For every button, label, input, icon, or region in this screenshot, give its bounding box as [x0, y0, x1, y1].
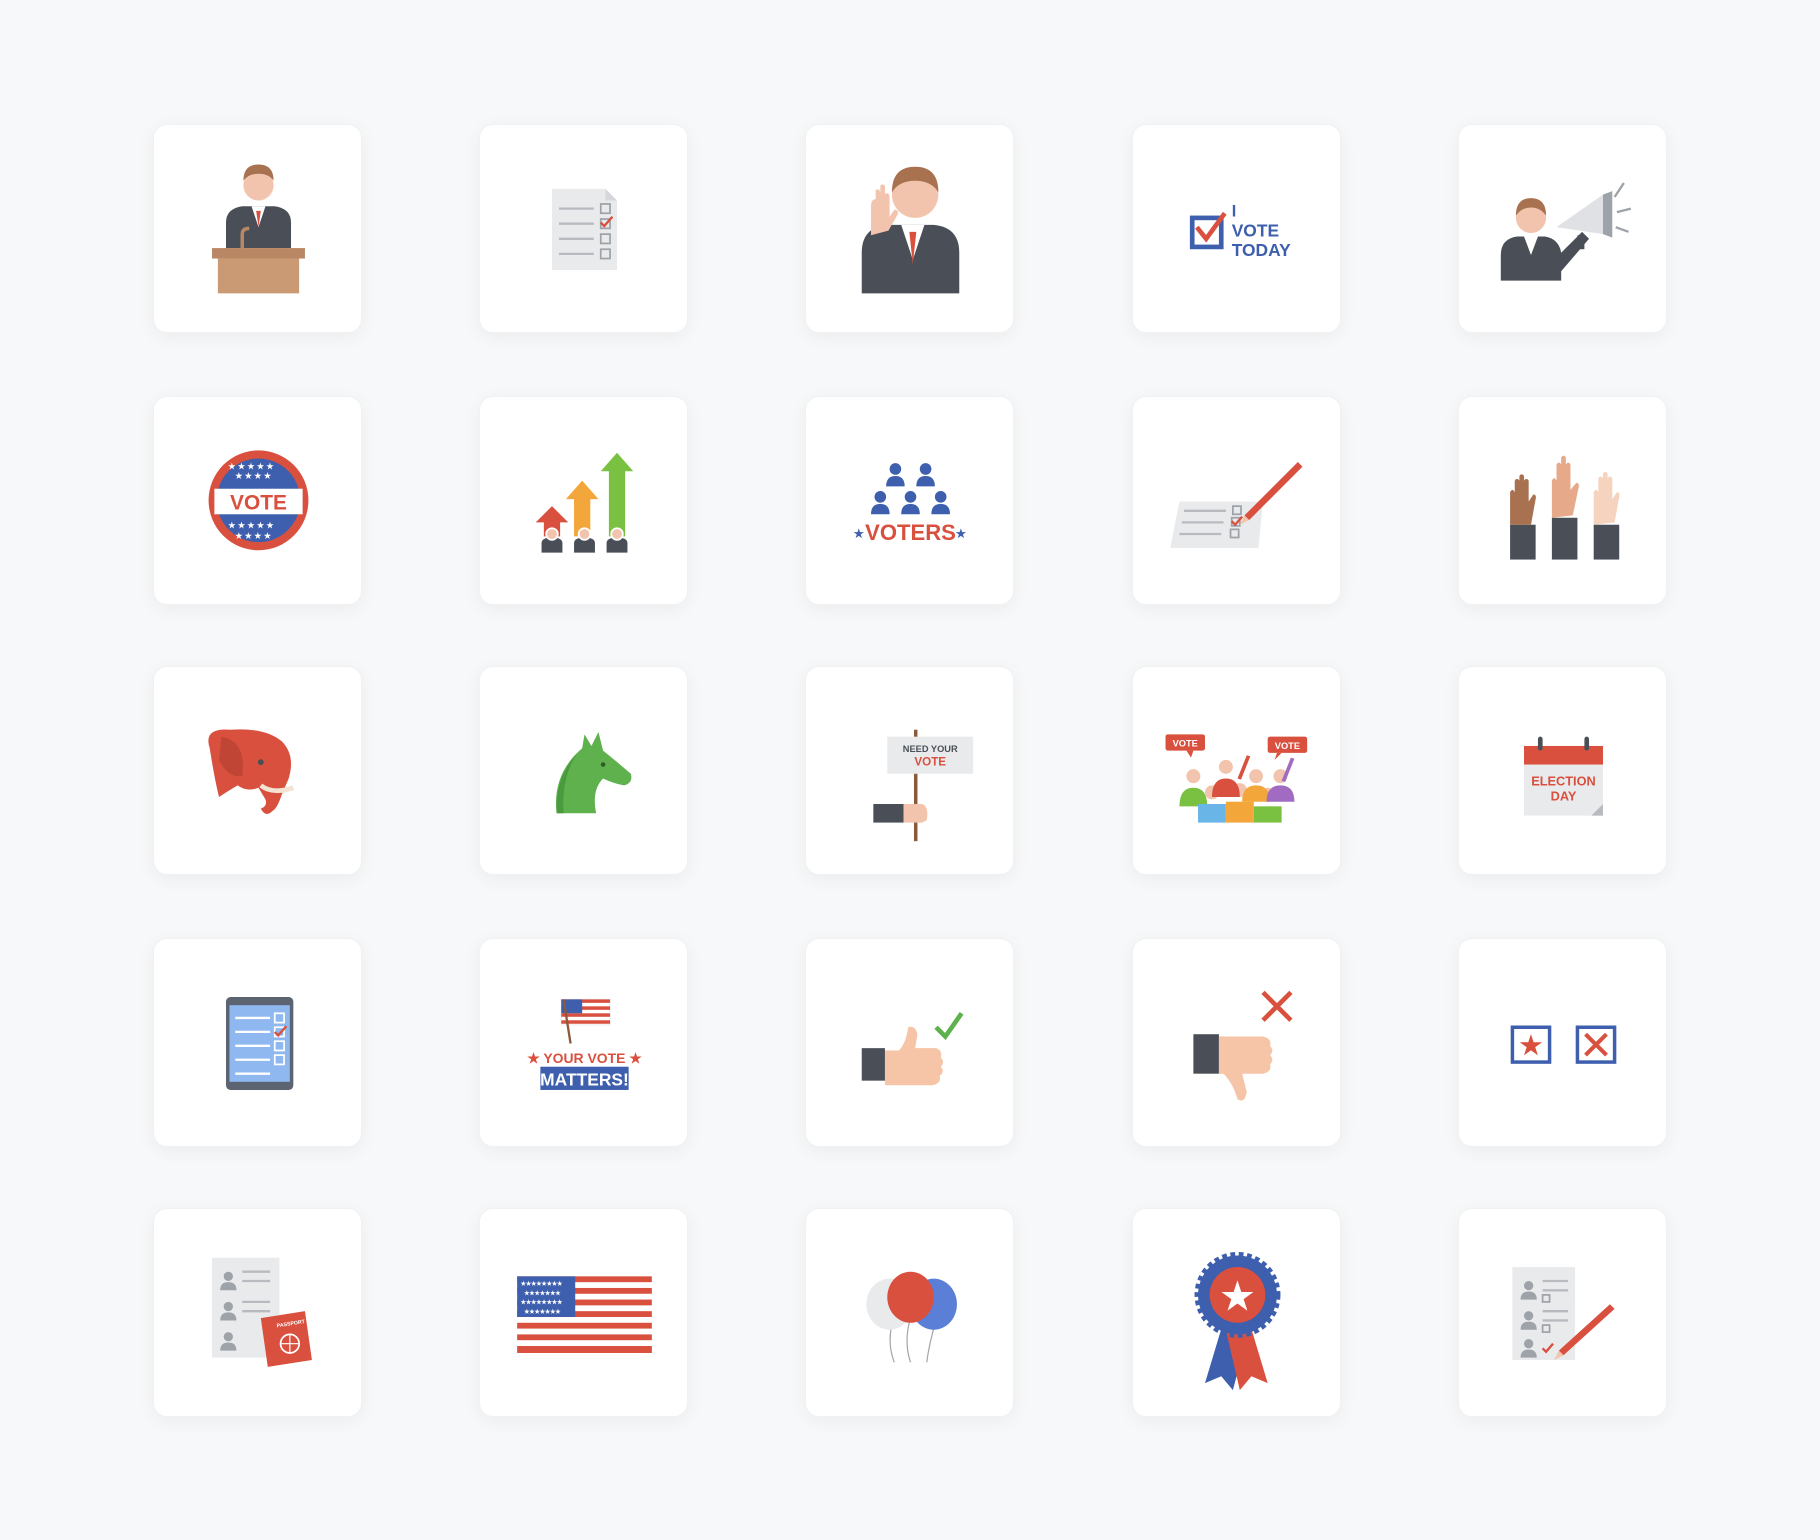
icon: raised hands: [1510, 456, 1620, 560]
icon: american flag: [517, 1276, 652, 1353]
icon: ballot document: [552, 189, 617, 270]
icon: protest sign: NEED YOUR: [903, 744, 958, 754]
card: ballot document: [479, 124, 688, 333]
card: raised hands: [1458, 396, 1667, 605]
icon: protest sign: [873, 730, 973, 841]
card: I vote today: [1132, 124, 1341, 333]
card: vote badge: [153, 396, 362, 605]
card: speaker at podium: [153, 124, 362, 333]
icon: american flag: ★★★★★★★: [524, 1308, 561, 1315]
icon: crowd with vote bubbles: VOTE: [1173, 739, 1198, 749]
icon: crowd with vote bubbles: [1166, 734, 1307, 823]
card: need your vote sign: [805, 666, 1014, 875]
icon: vote badge: ★ ★ ★ ★: [234, 532, 272, 541]
card: star and x boxes: [1458, 938, 1667, 1147]
icon: growth arrows with people: [536, 453, 633, 553]
icon: vote badge: [209, 450, 308, 550]
card: crowd voting: [1132, 666, 1341, 875]
card: thumbs down: [1132, 938, 1341, 1147]
icon: thumbs up with check: [862, 1013, 962, 1085]
icon: registration list with pencil: [1512, 1267, 1615, 1360]
icon: balloons: [866, 1272, 957, 1362]
card: award rosette: [1132, 1208, 1341, 1417]
icon: vote badge: ★ ★ ★ ★: [234, 471, 272, 480]
icon: ballot with pencil: [1170, 462, 1303, 548]
card: papers with pencil: [1458, 1208, 1667, 1417]
card: megaphone man: [1458, 124, 1667, 333]
icon: your vote matters banner: MATTERS!: [540, 1069, 629, 1089]
icon: I vote today: VOTE: [1232, 220, 1279, 240]
card: oath man: [805, 124, 1014, 333]
card: thumbs up: [805, 938, 1014, 1147]
icon: american flag: ★★★★★★★★: [521, 1281, 563, 1288]
icon: voters group: [854, 463, 967, 545]
icon: election day calendar: ELECTION: [1531, 773, 1596, 788]
icon: election day calendar: DAY: [1551, 789, 1577, 804]
card: donkey: [479, 666, 688, 875]
card: US flag: [479, 1208, 688, 1417]
icon: rosette ribbon: [1198, 1255, 1277, 1390]
icon: voters group: ★: [854, 527, 865, 540]
icon: thumbs down with X: [1193, 992, 1291, 1101]
icon: man with megaphone: [1501, 183, 1631, 281]
icon: protest sign: VOTE: [914, 756, 946, 769]
card: ID documents and passport: [153, 1208, 362, 1417]
icon: american flag: ★★★★★★★★: [521, 1299, 563, 1306]
icon: star box and X box: ★: [1520, 1032, 1544, 1060]
icon: I vote today: TODAY: [1232, 240, 1291, 260]
icon: star box and X box: [1512, 1027, 1615, 1062]
icon: I vote today: I: [1232, 203, 1236, 221]
icon: rosette ribbon: ★: [1221, 1275, 1254, 1317]
icon: registration papers with passport: PASSPORT: [276, 1319, 306, 1329]
icon: crowd with vote bubbles: VOTE: [1275, 741, 1300, 751]
icon: your vote matters banner: ★ YOUR VOTE ★: [527, 1050, 642, 1066]
icon: red elephant: [208, 729, 293, 814]
card: balloons: [805, 1208, 1014, 1417]
icon: election day calendar: [1524, 737, 1603, 816]
icon: your vote matters banner: [527, 999, 642, 1090]
card: voters: [805, 396, 1014, 605]
icon: voters group: ★: [956, 527, 967, 540]
icon: speaker at podium: [212, 164, 305, 293]
card: growth arrows: [479, 396, 688, 605]
icon: voters group: VOTERS: [865, 520, 956, 545]
icon: vote badge: ★ ★ ★ ★ ★: [227, 521, 274, 530]
icon: I vote today: [1192, 203, 1291, 260]
card: elephant: [153, 666, 362, 875]
icon: registration papers with passport: [212, 1258, 312, 1367]
card: your vote matters: [479, 938, 688, 1147]
card: election day calendar: [1458, 666, 1667, 875]
icon: vote badge: VOTE: [230, 492, 287, 515]
icon: vote badge: ★ ★ ★ ★ ★: [227, 462, 274, 471]
icon: tablet ballot: [226, 997, 293, 1090]
icon: man raising hand: [862, 167, 959, 293]
card: ballot with pencil: [1132, 396, 1341, 605]
card: tablet ballot: [153, 938, 362, 1147]
icon: green donkey: [556, 732, 631, 813]
icon: american flag: ★★★★★★★: [524, 1290, 561, 1297]
